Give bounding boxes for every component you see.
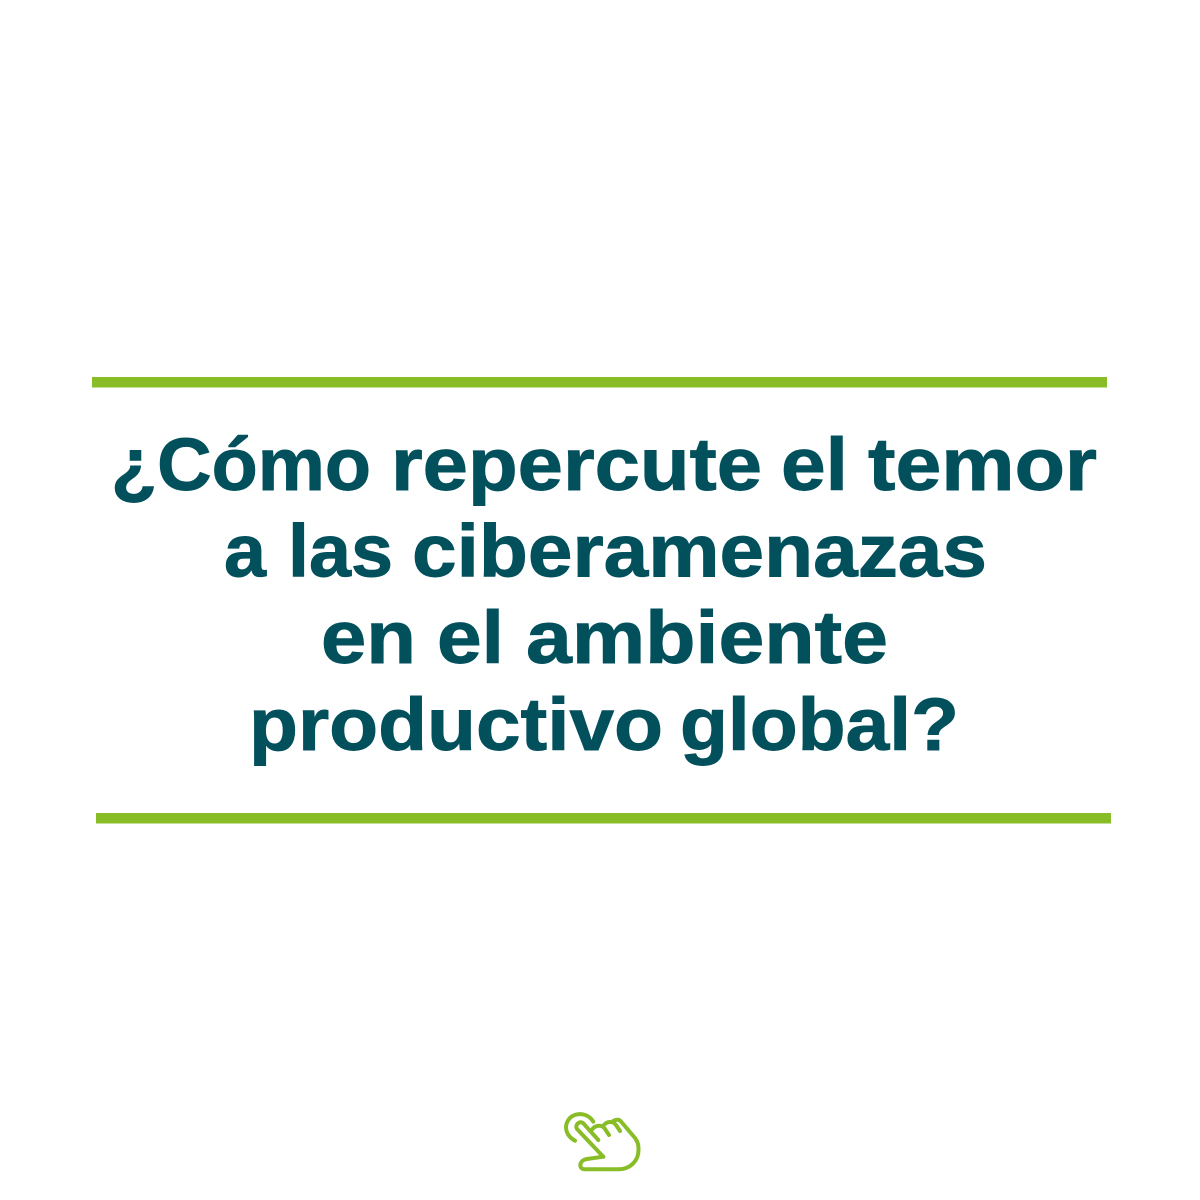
bottom green rule — [96, 813, 1111, 824]
title: repercute — [391, 423, 762, 506]
title: global? — [680, 683, 959, 766]
title: temor — [868, 423, 1097, 506]
title: ¿Cómo — [111, 423, 371, 506]
title: las — [288, 510, 393, 592]
title — [111, 423, 1097, 766]
title: a — [224, 510, 267, 592]
title: el — [781, 423, 848, 506]
icon: tapping hand — [566, 1114, 638, 1169]
title: productivo — [249, 683, 663, 766]
title: ciberamenazas — [412, 510, 987, 592]
title: en — [321, 596, 416, 679]
title: ambiente — [526, 596, 888, 679]
top green rule — [92, 377, 1107, 388]
title: el — [437, 596, 504, 679]
